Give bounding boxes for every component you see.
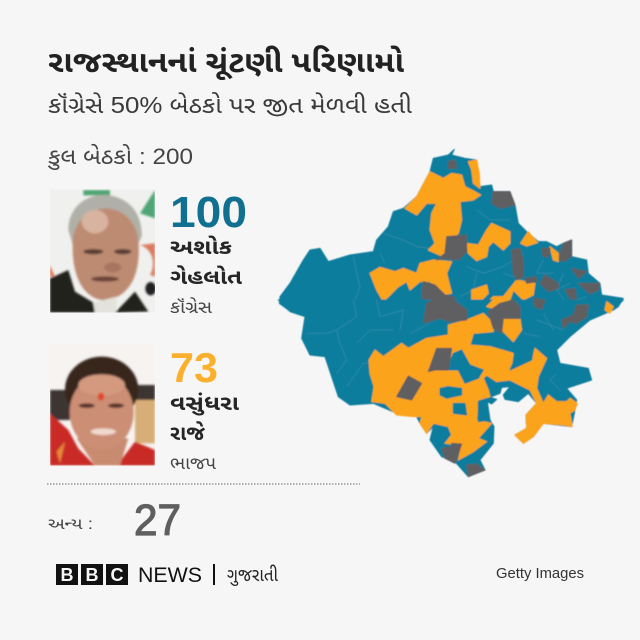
photo: Ashok Gehlot <box>50 189 156 313</box>
name: Vasundhara Raje <box>170 391 240 445</box>
map north half <box>279 149 623 310</box>
name: Vasundhara Raje: વસુંધરા <box>170 391 240 416</box>
name: Ashok Gehlot: ગેહલોત <box>170 264 242 289</box>
name: Ashok Gehlot: અશોક <box>170 235 233 259</box>
name: Vasundhara Raje: રાજે <box>170 420 205 445</box>
BBC News Gujarati logo: ગુજરાતી <box>227 565 278 587</box>
BBC News Gujarati logo: C <box>110 565 124 585</box>
BBC News Gujarati logo: B <box>86 565 98 585</box>
map: Rajasthan constituencies <box>278 149 623 477</box>
seats: BJP: 73 <box>170 344 218 391</box>
name: Ashok Gehlot <box>170 235 242 289</box>
party: BJP: ભાજપ <box>170 454 216 473</box>
map south half <box>278 300 623 477</box>
photo: Vasundhara Raje <box>50 344 155 466</box>
others label: અન્ય : <box>48 516 93 533</box>
photo credit: Getty Images <box>496 566 584 582</box>
BBC News Gujarati logo <box>56 564 278 587</box>
total seats: કુલ બેઠકો : 200 <box>47 144 193 170</box>
others count: 27 <box>134 496 181 545</box>
title: રાજસ્થાનનાં ચૂંટણી પરિણામો <box>48 45 404 80</box>
seats: Congress: 100 <box>170 188 247 237</box>
BBC News Gujarati logo: NEWS <box>138 564 202 587</box>
BBC News Gujarati logo: B <box>60 565 74 585</box>
party: Congress: કૉંગ્રેસ <box>170 298 212 317</box>
subtitle: કૉંગ્રેસે 50% બેઠકો પર જીત મેળવી હતી <box>48 92 412 118</box>
